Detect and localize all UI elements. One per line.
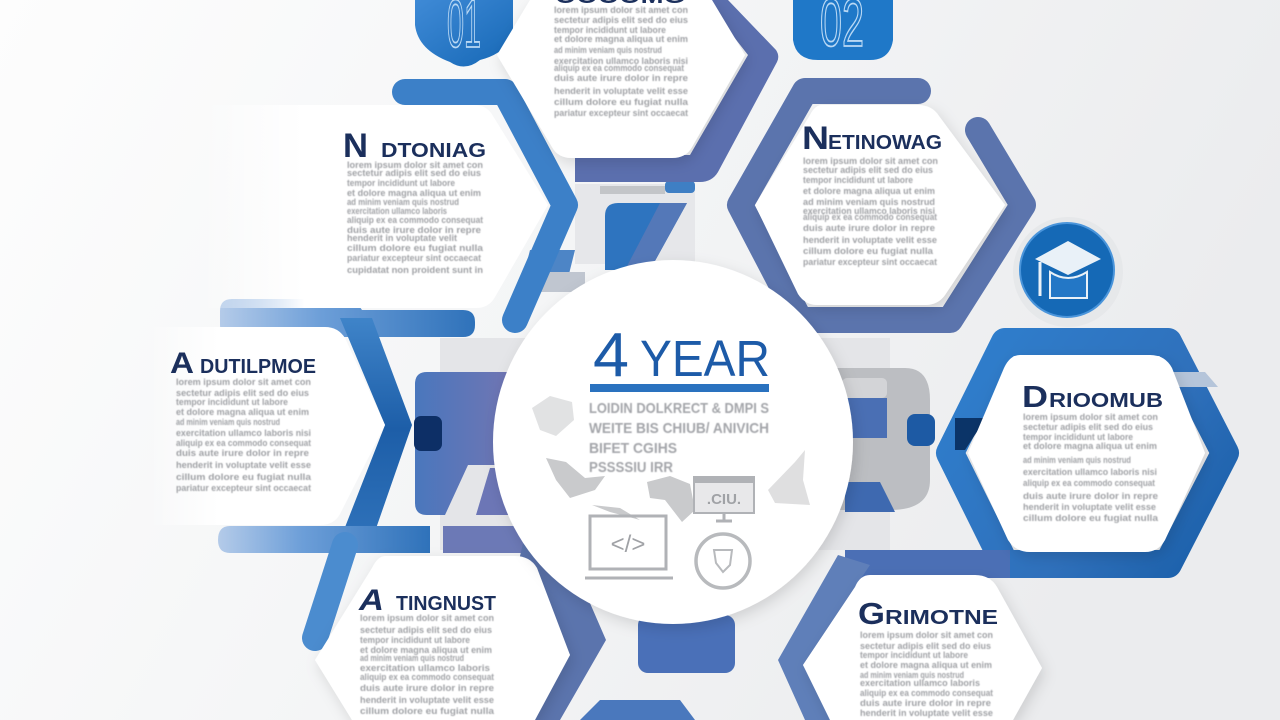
icon: monitor: .CIU. bbox=[707, 491, 741, 508]
heading: mid right bbox=[1022, 379, 1163, 414]
heading: lower left: A bbox=[358, 584, 384, 617]
icon: graduation cap bbox=[1013, 217, 1123, 327]
text block: lower right: henderit in voluptate velit esse bbox=[860, 708, 993, 718]
panel: upper right card bbox=[755, 105, 1005, 305]
icon: laptop code: </> bbox=[611, 531, 645, 558]
text block: lower right bbox=[860, 630, 993, 718]
text block: top centre: henderit in voluptate velit esse bbox=[554, 86, 688, 96]
text block: centre: PSSSSIU IRR bbox=[589, 459, 673, 476]
text block: upper right: et dolore magna aliqua ut enim bbox=[803, 186, 935, 196]
panel: band lower left bbox=[520, 527, 606, 720]
text block: upper right: exercitation ullamco laboris nisi bbox=[803, 206, 935, 216]
text block: mid right: tempor incididunt ut labore bbox=[1023, 432, 1133, 442]
text block: lower right: tempor incididunt ut labore bbox=[860, 650, 968, 660]
text block: mid right: et dolore magna aliqua ut enim bbox=[1023, 441, 1157, 451]
heading: 4 YEAR: 4 bbox=[593, 321, 629, 390]
text block: lower left: tempor incididunt ut labore bbox=[360, 635, 470, 645]
heading: upper left: DTONIAG bbox=[381, 140, 486, 162]
heading: upper right bbox=[802, 120, 942, 156]
heading: mid left: A bbox=[170, 347, 194, 380]
text block: mid left: sectetur adipis elit sed do eius bbox=[176, 388, 309, 398]
text block: upper right: pariatur excepteur sint occaecat bbox=[803, 257, 937, 267]
text block: upper left: tempor incididunt ut labore bbox=[347, 178, 455, 188]
text block: top centre: tempor incididunt ut labore bbox=[554, 25, 666, 35]
text block: lower right: ad minim veniam quis nostrud bbox=[860, 670, 964, 680]
text block: upper left: ad minim veniam quis nostrud bbox=[347, 197, 459, 207]
text block: centre: WEITE BIS CHIUB/ ANIVICH bbox=[589, 420, 769, 437]
text block: lower right: exercitation ullamco laboris bbox=[860, 678, 980, 688]
text block: mid right: cillum dolore eu fugiat nulla bbox=[1023, 513, 1159, 523]
text block: mid right: sectetur adipis elit sed do eius bbox=[1023, 422, 1153, 432]
text block: lower left: et dolore magna aliqua ut enim bbox=[360, 645, 492, 655]
text block: lower right: et dolore magna aliqua ut enim bbox=[860, 660, 992, 670]
text block: lower left: exercitation ullamco laboris bbox=[360, 663, 490, 673]
heading: mid left: DUTILPMOE bbox=[200, 356, 316, 378]
text block: top centre: aliquip ex ea commodo consequat bbox=[554, 63, 684, 73]
text block: mid left bbox=[176, 377, 312, 493]
text block: mid right: duis aute irure dolor in repre bbox=[1023, 491, 1158, 501]
panel: mid left card bbox=[148, 327, 385, 525]
text block: mid left: lorem ipsum dolor sit amet con bbox=[176, 377, 311, 387]
text block: lower left: ad minim veniam quis nostrud bbox=[360, 653, 464, 663]
icon: world map bbox=[532, 396, 810, 522]
text block: lower left: cillum dolore eu fugiat nulla bbox=[360, 706, 495, 716]
text block: mid left: ad minim veniam quis nostrud bbox=[176, 417, 280, 427]
text block: upper left: cupidatat non proident sunt in bbox=[347, 265, 483, 275]
text block: lower right: duis aute irure dolor in repre bbox=[860, 698, 991, 708]
text block: lower right: lorem ipsum dolor sit amet con bbox=[860, 630, 993, 640]
text block: mid right: exercitation ullamco laboris nisi bbox=[1023, 467, 1157, 477]
text block: mid left: aliquip ex ea commodo consequat bbox=[176, 438, 311, 448]
text block: mid left: pariatur excepteur sint occaecat bbox=[176, 483, 311, 493]
heading: upper left bbox=[343, 127, 486, 165]
text block: top centre: sectetur adipis elit sed do eius bbox=[554, 15, 688, 25]
icon: monitor bbox=[694, 476, 754, 521]
text block: upper left: sectetur adipis elit sed do eius bbox=[347, 168, 481, 178]
panel: band top centre bbox=[575, 0, 778, 182]
text block: mid right: henderit in voluptate velit esse bbox=[1023, 502, 1156, 512]
text block: lower right: sectetur adipis elit sed do eius bbox=[860, 641, 991, 651]
panel: lower left card bbox=[315, 556, 570, 720]
panel: mid right card bbox=[968, 355, 1205, 552]
text block: lower left: henderit in voluptate velit esse bbox=[360, 695, 494, 705]
heading: 4 YEAR: YEAR bbox=[640, 330, 770, 387]
text block: lower right: aliquip ex ea commodo consequat bbox=[860, 688, 993, 698]
heading: upper right: ETINOWAG bbox=[828, 132, 942, 154]
text block: lower left: sectetur adipis elit sed do eius bbox=[360, 625, 492, 635]
text block: upper right: henderit in voluptate velit esse bbox=[803, 235, 937, 245]
text block: top centre: ad minim veniam quis nostrud bbox=[554, 45, 662, 55]
heading: lower right: G bbox=[858, 596, 885, 631]
text block: lower left bbox=[360, 613, 495, 716]
panel: band mid left bbox=[218, 299, 593, 638]
text block: top centre: duis aute irure dolor in repre bbox=[554, 73, 688, 83]
text block: top centre: pariatur excepteur sint occaecat bbox=[554, 108, 688, 118]
heading: 4 YEAR bbox=[593, 321, 770, 390]
text block: upper left bbox=[347, 160, 484, 275]
text block: upper right: tempor incididunt ut labore bbox=[803, 175, 913, 185]
text block: upper left: cillum dolore eu fugiat nulla bbox=[347, 243, 484, 253]
text block: top centre: cillum dolore eu fugiat nulla bbox=[554, 97, 689, 107]
text block: upper left: lorem ipsum dolor sit amet con bbox=[347, 160, 483, 170]
panel: top centre card bbox=[497, 0, 745, 158]
text block: lower left: lorem ipsum dolor sit amet con bbox=[360, 613, 494, 623]
heading: upper right: N bbox=[802, 120, 829, 156]
text block: mid left: tempor incididunt ut labore bbox=[176, 397, 288, 407]
text block: centre: BIFET CGIHS bbox=[589, 440, 677, 457]
text block: top centre bbox=[554, 5, 689, 118]
text block: centre: LOIDIN DOLKRECT & DMPI S bbox=[589, 400, 769, 417]
text block: mid left: cillum dolore eu fugiat nulla bbox=[176, 472, 312, 482]
heading: lower right: RIMOTNE bbox=[885, 607, 998, 629]
text block: upper left: exercitation ullamco laboris bbox=[347, 206, 447, 216]
icon: shield badge bbox=[696, 534, 750, 588]
text block: mid right: lorem ipsum dolor sit amet con bbox=[1023, 412, 1158, 422]
panel: band upper left bbox=[405, 92, 565, 320]
central connector backdrop bbox=[415, 181, 935, 720]
text block: mid right bbox=[1023, 412, 1159, 523]
text block: upper left: pariatur excepteur sint occaecat bbox=[347, 253, 481, 263]
text block: top centre: lorem ipsum dolor sit amet con bbox=[554, 5, 688, 15]
panel: upper left card bbox=[200, 105, 548, 308]
text block: upper right: cillum dolore eu fugiat nulla bbox=[803, 246, 934, 256]
heading: upper left: N bbox=[343, 127, 368, 165]
heading: lower right bbox=[858, 596, 998, 631]
text block: upper left: henderit in voluptate velit bbox=[347, 233, 457, 243]
badge: 01 bbox=[415, 0, 513, 67]
text block: mid left: duis aute irure dolor in repre bbox=[176, 448, 309, 458]
text block: upper right: ad minim veniam quis nostrud bbox=[803, 197, 935, 207]
text block: upper right: sectetur adipis elit sed do eius bbox=[803, 165, 933, 175]
text block: lower left: aliquip ex ea commodo consequat bbox=[360, 672, 494, 682]
text block: mid left: henderit in voluptate velit esse bbox=[176, 460, 311, 470]
divider under heading bbox=[590, 384, 769, 392]
heading: lower left bbox=[358, 584, 496, 617]
heading: mid left bbox=[170, 347, 316, 380]
text block: lower left: duis aute irure dolor in repre bbox=[360, 683, 494, 693]
text block: mid left: exercitation ullamco laboris nisi bbox=[176, 428, 311, 438]
text block: upper left: et dolore magna aliqua ut enim bbox=[347, 188, 481, 198]
heading: lower left: TINGNUST bbox=[396, 593, 496, 615]
heading: mid right: D bbox=[1022, 379, 1048, 414]
text block: centre bbox=[589, 400, 769, 476]
text block: upper right: lorem ipsum dolor sit amet con bbox=[803, 156, 938, 166]
panel: band mid right bbox=[845, 342, 1225, 578]
text block: mid right: aliquip ex ea commodo consequat bbox=[1023, 478, 1155, 488]
text block: top centre: exercitation ullamco laboris nisi bbox=[554, 56, 688, 66]
panel: central circle bbox=[493, 260, 853, 624]
text block: upper left: duis aute irure dolor in repre bbox=[347, 225, 481, 235]
text block: top centre: et dolore magna aliqua ut enim bbox=[554, 34, 688, 44]
panel: band upper right bbox=[740, 91, 1023, 320]
text block: upper right bbox=[803, 156, 938, 267]
heading: mid right: RIOOMUB bbox=[1049, 390, 1163, 412]
panel: band lower right bbox=[778, 555, 870, 720]
icon: laptop code bbox=[585, 516, 673, 578]
text block: mid right: ad minim veniam quis nostrud bbox=[1023, 455, 1131, 465]
text block: upper left: aliquip ex ea commodo consequat bbox=[347, 215, 483, 225]
text block: mid left: et dolore magna aliqua ut enim bbox=[176, 407, 309, 417]
text block: upper right: duis aute irure dolor in repre bbox=[803, 223, 935, 233]
panel: lower right card bbox=[803, 575, 1042, 720]
text block: upper right: aliquip ex ea commodo consequat bbox=[803, 212, 937, 222]
